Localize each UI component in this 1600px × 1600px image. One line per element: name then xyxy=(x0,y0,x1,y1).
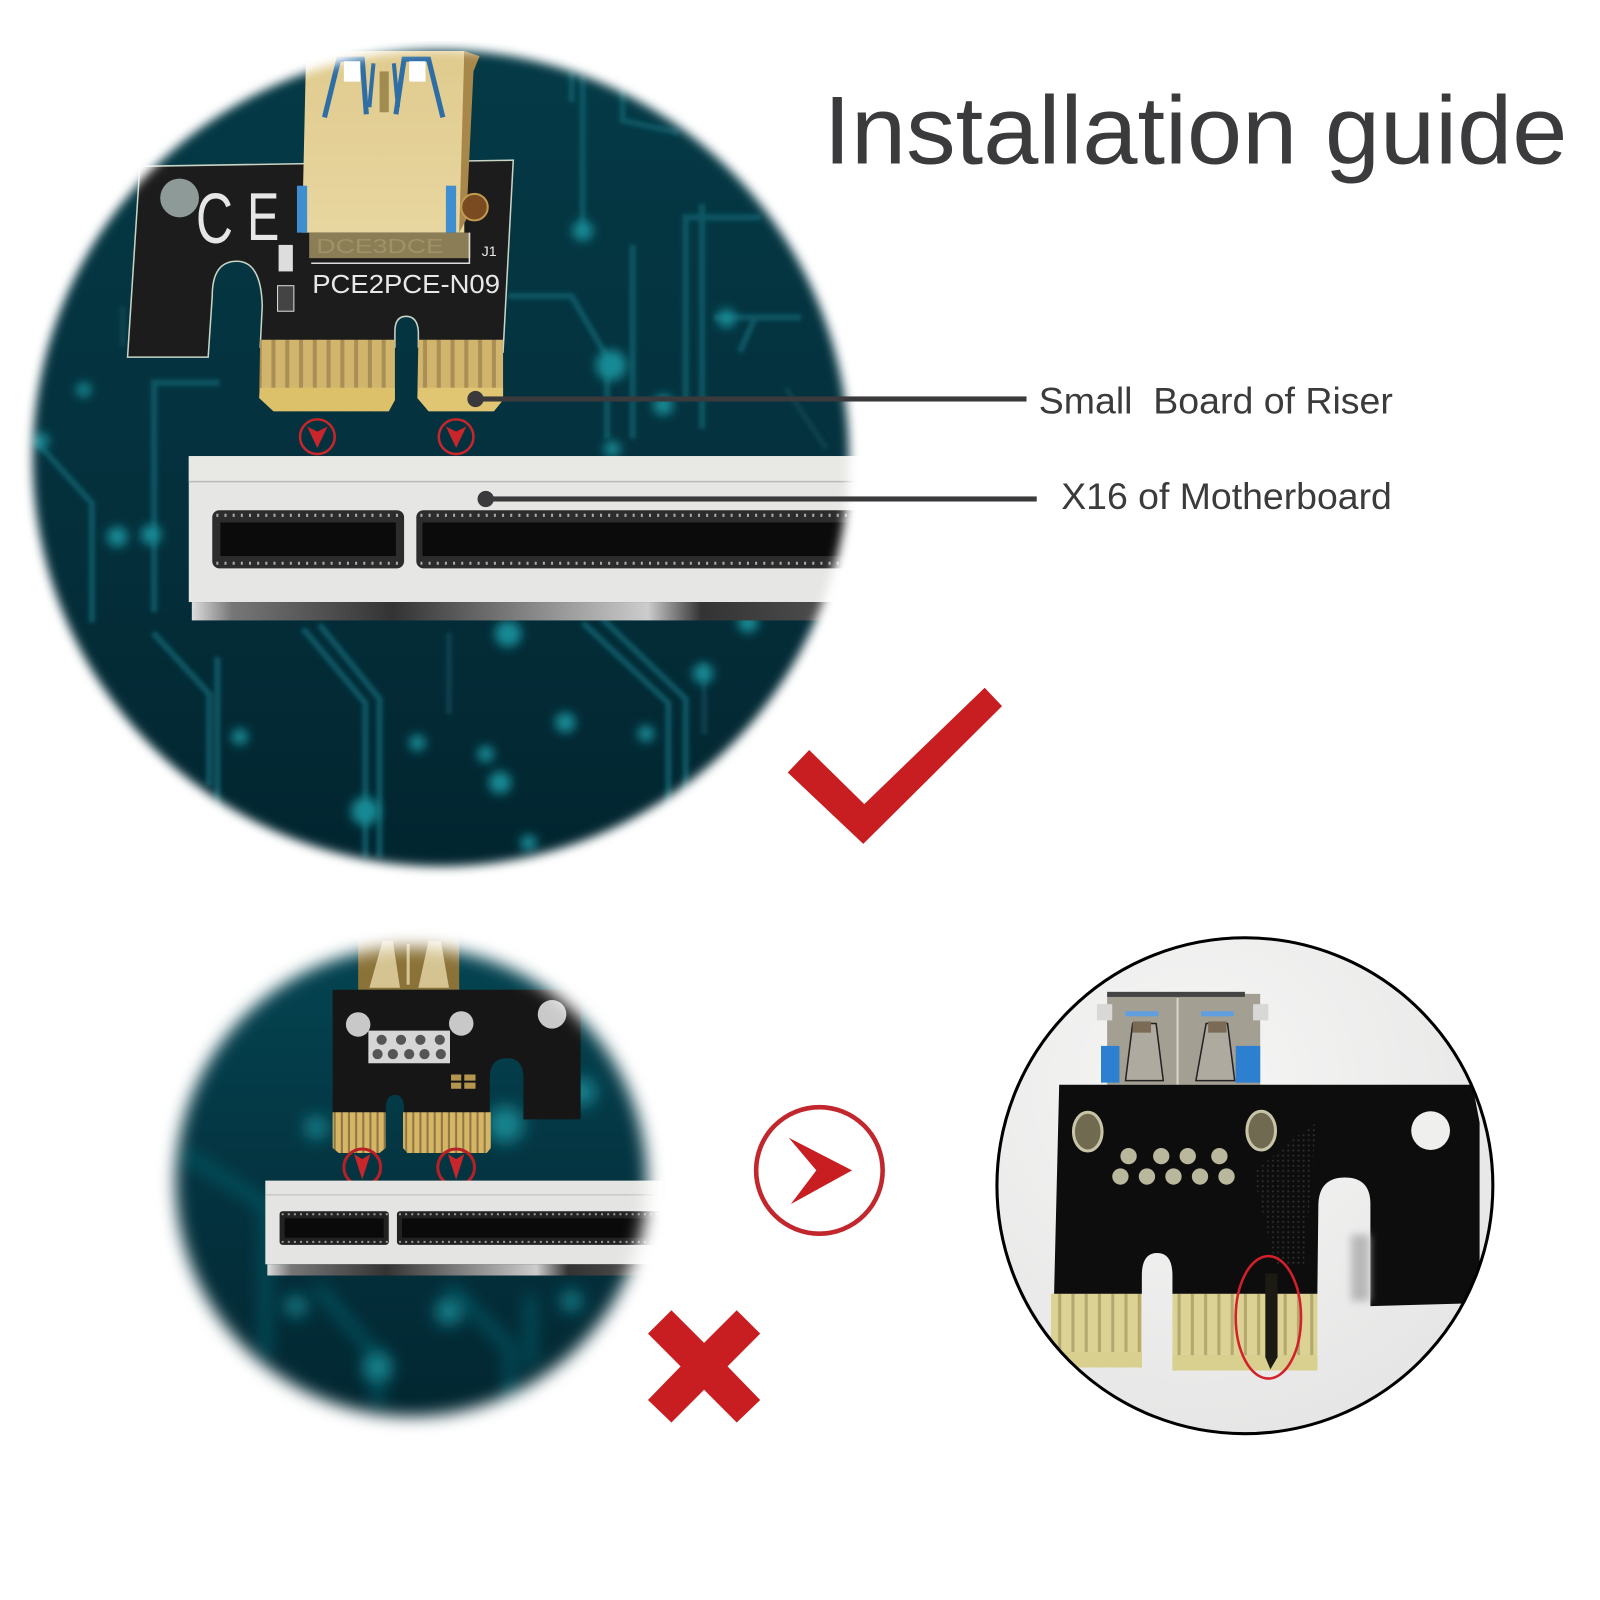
icon: red cross xyxy=(648,1310,760,1422)
callout: small board of riser xyxy=(467,380,1393,421)
red markers xyxy=(344,1149,474,1186)
damaged board contents xyxy=(1051,992,1480,1370)
red alignment marker left xyxy=(300,419,335,454)
gold fingers xyxy=(333,1112,491,1153)
icon: red arrow in circle xyxy=(756,1107,883,1234)
red alignment marker right xyxy=(439,419,473,454)
panel: correct installation circle xyxy=(20,41,867,878)
silkscreen labels: DCE3DCE xyxy=(316,236,444,258)
gold fingers xyxy=(1051,1294,1317,1370)
solder-mask hatch texture xyxy=(1253,1122,1316,1265)
silkscreen labels xyxy=(314,239,499,294)
USB connector silver xyxy=(1097,992,1268,1085)
PCIe slot xyxy=(265,1181,664,1276)
PCIe x16 slot xyxy=(189,456,865,620)
red highlight ellipse xyxy=(1236,1256,1301,1379)
riser board black PCB xyxy=(128,160,513,357)
title: Installation guide xyxy=(823,75,1567,184)
panel: damaged board detail circle xyxy=(997,938,1493,1434)
USB connector shell xyxy=(297,51,488,263)
CE mark: C xyxy=(196,180,233,259)
callout: x16 of motherboard: X16 of Motherboard xyxy=(1061,476,1392,517)
riser board gold fingers xyxy=(259,340,503,411)
rear PCB xyxy=(333,990,581,1119)
USB connector rear xyxy=(358,935,460,990)
icon: red check mark xyxy=(788,688,1002,844)
solder pads xyxy=(346,1000,566,1089)
burn mark xyxy=(1265,1273,1278,1369)
notch shadow xyxy=(1351,1235,1369,1301)
mounting hole xyxy=(1411,1111,1450,1150)
screw pads xyxy=(1073,1111,1276,1151)
mounting hole xyxy=(160,179,199,217)
pin holes xyxy=(1112,1148,1235,1185)
CE mark: E xyxy=(247,180,279,255)
black PCB xyxy=(1054,1085,1480,1306)
callout: small board of riser: Small Board of Riser xyxy=(1039,380,1393,421)
silkscreen labels: PCE2PCE-N09 xyxy=(312,271,500,299)
panel: incorrect installation circle xyxy=(153,923,673,1444)
silkscreen labels: J1 xyxy=(482,244,497,260)
circuit board background xyxy=(20,41,867,878)
CE mark xyxy=(198,193,278,244)
LED component xyxy=(278,245,294,311)
blurred circuit background xyxy=(153,923,673,1444)
circle outline xyxy=(997,938,1493,1434)
callout: x16 of motherboard xyxy=(478,476,1392,517)
